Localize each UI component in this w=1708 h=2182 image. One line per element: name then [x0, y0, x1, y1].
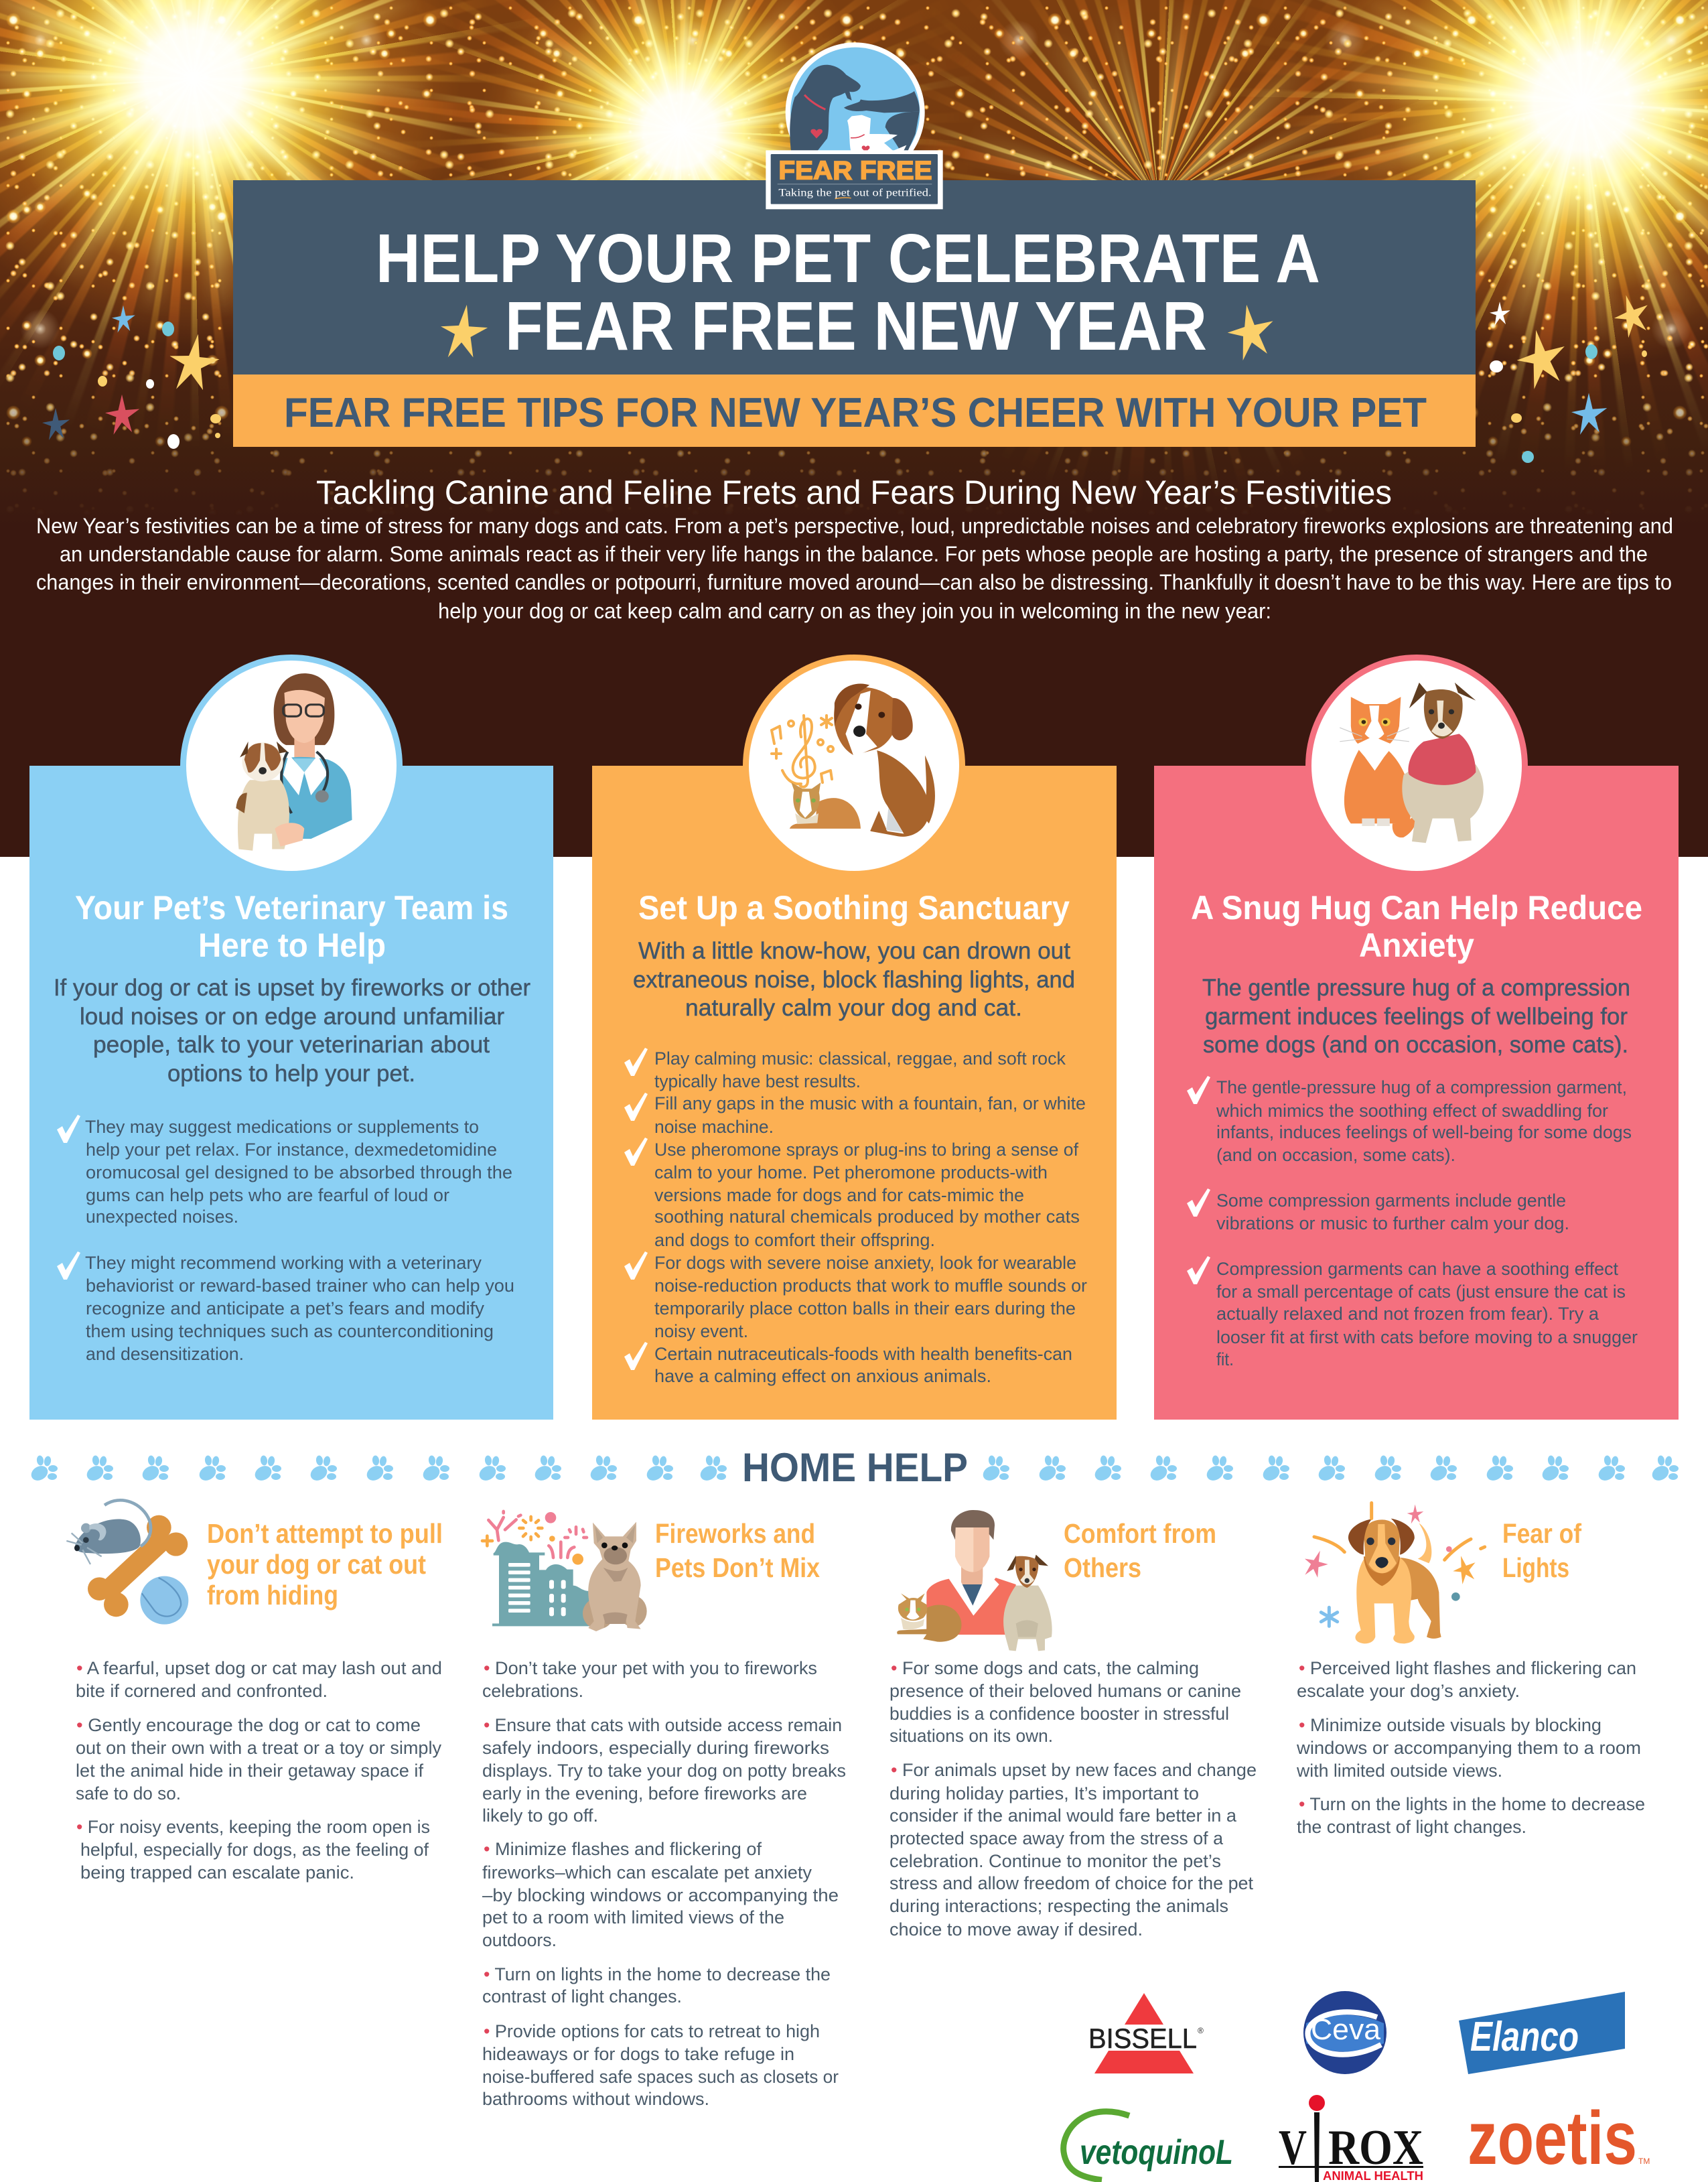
checklist: They may suggest medications or supplements to: [85, 1117, 479, 1137]
tips: protected space away from the stress of a: [889, 1828, 1224, 1848]
tips: situations on its own.: [889, 1726, 1053, 1746]
icon: city, fireworks and bulldog: [482, 1511, 647, 1631]
checklist: and dogs to comfort their offspring.: [654, 1230, 935, 1250]
logo: Vetoquinol: [1064, 2112, 1233, 2180]
panel: snug hug: [1154, 655, 1679, 1420]
tips: safe to do so.: [76, 1783, 181, 1803]
tips: • Perceived light flashes and flickering can: [1299, 1658, 1636, 1678]
checklist: which mimics the soothing effect of swaddling for: [1216, 1101, 1608, 1121]
tips: • Minimize outside visuals by blocking: [1299, 1715, 1602, 1735]
checklist: gums can help pets who are fearful of loud or: [86, 1185, 449, 1205]
checklist: The gentle-pressure hug of a compression garment,: [1216, 1077, 1627, 1097]
tips: the contrast of light changes.: [1297, 1817, 1526, 1837]
checklist: typically have best results.: [654, 1071, 861, 1091]
heading: [655, 1518, 820, 1583]
fireworks background: [0, 0, 1708, 857]
checklist: [1187, 1076, 1638, 1369]
intro text: loud noises or on edge around unfamiliar: [80, 1004, 504, 1030]
tips: stress and allow freedom of choice for the pet: [889, 1873, 1253, 1893]
tips: helpful, especially for dogs, as the feeling of: [80, 1840, 429, 1860]
tips: • Provide options for cats to retreat to high: [484, 2021, 820, 2041]
logo: Elanco: Elanco: [1470, 2014, 1579, 2060]
checklist: fit.: [1216, 1349, 1234, 1369]
logo: Bissell: ®: [1198, 2026, 1204, 2035]
heading: Anxiety: [1359, 927, 1474, 964]
tips: • A fearful, upset dog or cat may lash out and: [76, 1658, 442, 1678]
heading: Fear of: [1502, 1518, 1581, 1549]
checklist: Use pheromone sprays or plug-ins to bring a sense of: [654, 1140, 1078, 1160]
subtitle band: FEAR FREE TIPS FOR NEW YEAR’S CHEER WITH YOUR PET: [284, 390, 1427, 436]
tips: • For animals upset by new faces and change: [891, 1760, 1257, 1780]
checklist: recognize and anticipate a pet’s fears and modify: [86, 1298, 484, 1318]
checklist: versions made for dogs and for cats-mimic the: [654, 1185, 1024, 1205]
tips: • Gently encourage the dog or cat to come: [76, 1715, 421, 1735]
intro text: some dogs (and on occasion, some cats).: [1203, 1032, 1628, 1058]
title banner: HELP YOUR PET CELEBRATE A: [376, 220, 1320, 297]
checklist: behaviorist or reward-based trainer who can help you: [86, 1276, 514, 1296]
icon: vet with dog: [236, 673, 352, 851]
checklist: for a small percentage of cats (just ensure the cat is: [1216, 1282, 1626, 1302]
checklist: them using techniques such as counterconditioning: [86, 1321, 494, 1341]
heading: Here to Help: [198, 927, 386, 964]
heading: Comfort from: [1064, 1518, 1216, 1549]
checklist: noise-reduction products that work to muffle sounds or: [654, 1276, 1087, 1296]
section heading: home help with paw row: HOME HELP: [742, 1445, 968, 1490]
column: comfort: [889, 1510, 1257, 1939]
intro text: [1202, 975, 1630, 1058]
logo: Ceva: [1303, 1991, 1386, 2074]
tips: [889, 1658, 1257, 1939]
heading: Lights: [1502, 1552, 1569, 1583]
tips: • Minimize flashes and flickering of: [484, 1839, 762, 1859]
intro paragraph: [36, 514, 1673, 623]
tips: outdoors.: [482, 1930, 557, 1950]
column: fireworks: [482, 1511, 846, 2109]
checklist: Play calming music: classical, reggae, and soft rock: [654, 1048, 1066, 1069]
logo: Bissell: BISSELL: [1088, 2023, 1197, 2054]
checklist: and desensitization.: [86, 1344, 244, 1364]
icon: music notes: [772, 715, 833, 787]
icon: dog: [834, 684, 935, 837]
intro paragraph: changes in their environment—decorations, scented candles or potpourri, furniture moved around—can also be distressing. Thankfully it doesn’t have to be this way. Here are tips to: [36, 570, 1672, 594]
logo: Elanco: [1459, 1992, 1625, 2074]
checklist: (and on occasion, some cats).: [1216, 1145, 1455, 1165]
checklist: [57, 1115, 514, 1364]
panel: soothing sanctuary: [592, 655, 1117, 1420]
tips: presence of their beloved humans or canine: [889, 1681, 1241, 1701]
tips: choice to move away if desired.: [889, 1919, 1143, 1939]
icon: man with cat and dog: [897, 1510, 1052, 1651]
intro text: naturally calm your dog and cat.: [685, 995, 1022, 1021]
tips: celebrations.: [482, 1681, 583, 1701]
title banner: [233, 180, 1476, 374]
intro paragraph: an understandable cause for alarm. Some animals react as if their very life hangs in the balance. For pets whose people are hosting a party, the presence of strangers and the: [60, 542, 1648, 566]
intro heading: Tackling Canine and Feline Frets and Fears During New Year’s Festivities: [316, 474, 1392, 511]
icon: cat and dog in sweater: [1340, 683, 1484, 843]
logo: Virox: ROX: [1328, 2120, 1423, 2175]
tips: • For noisy events, keeping the room open is: [76, 1817, 430, 1837]
intro text: With a little know-how, you can drown out: [638, 938, 1070, 964]
tips: bathrooms without windows.: [482, 2089, 709, 2109]
checklist: help your pet relax. For instance, dexmedetomidine: [86, 1140, 497, 1160]
title banner: FEAR FREE NEW YEAR: [505, 287, 1207, 364]
logo: Fear Free: FEAR FREE: [778, 155, 932, 185]
logo: Ceva: Ceva: [1311, 2013, 1381, 2046]
intro paragraph: New Year’s festivities can be a time of stress for many dogs and cats. From a pet’s perspective, loud, unpredictable noises and celebratory fireworks explosions are threatening and: [36, 514, 1673, 538]
checklist: calm to your home. Pet pheromone products-with: [654, 1162, 1048, 1182]
decorative stars and dots: right: [1490, 291, 1654, 463]
heading: Set Up a Soothing Sanctuary: [638, 889, 1070, 927]
checklist: noise machine.: [654, 1117, 774, 1137]
firework rays: [0, 0, 1708, 476]
tips: • Don’t take your pet with you to fireworks: [484, 1658, 817, 1678]
logo: Fear Free: Taking the pet out of petrified.: [778, 188, 932, 199]
checklist: They might recommend working with a veterinary: [85, 1253, 482, 1273]
checklist: Fill any gaps in the music with a fountain, fan, or white: [654, 1093, 1086, 1113]
tips: displays. Try to take your dog on potty breaks: [482, 1761, 846, 1781]
logo: Bissell: [1088, 1993, 1204, 2073]
heading: [207, 1518, 443, 1611]
checklist: [624, 1048, 1087, 1386]
tips: buddies is a confidence booster in stressful: [889, 1704, 1229, 1724]
tips: bite if cornered and confronted.: [76, 1681, 328, 1701]
column: lights: [1296, 1503, 1645, 1837]
heading: Your Pet’s Veterinary Team is: [75, 889, 508, 927]
checklist: have a calming effect on anxious animals.: [654, 1366, 991, 1386]
intro text: [54, 975, 530, 1087]
tips: • Turn on lights in the home to decrease the: [484, 1964, 831, 1984]
sponsor logos: [1064, 1991, 1650, 2182]
logo: Zoetis: zoetis: [1468, 2096, 1637, 2180]
decorative stars and dots: left: [42, 305, 223, 449]
tips: let the animal hide in their getaway space if: [76, 1761, 424, 1781]
tips: escalate your dog’s anxiety.: [1297, 1681, 1520, 1701]
intro paragraph: help your dog or cat keep calm and carry on as they join you in welcoming in the new year:: [438, 599, 1271, 623]
intro text: The gentle pressure hug of a compression: [1202, 975, 1630, 1001]
checklist: actually relaxed and not frozen from fear). Try a: [1216, 1304, 1599, 1324]
burst glows: [0, 0, 1708, 355]
tips: • For some dogs and cats, the calming: [891, 1658, 1199, 1678]
checklist: Compression garments can have a soothing effect: [1216, 1259, 1618, 1279]
icon: cat: [790, 782, 861, 829]
intro text: extraneous noise, block flashing lights, and: [633, 967, 1075, 993]
checklist: Certain nutraceuticals-foods with health benefits-can: [654, 1344, 1072, 1364]
checklist: For dogs with severe noise anxiety, look for wearable: [654, 1253, 1076, 1273]
intro text: people, talk to your veterinarian about: [93, 1032, 490, 1058]
heading: [1502, 1518, 1581, 1583]
heading: A Snug Hug Can Help Reduce: [1191, 889, 1642, 927]
logo: Virox: V: [1279, 2120, 1307, 2175]
panel: veterinary team: [29, 655, 553, 1420]
tips: likely to go off.: [482, 1805, 598, 1826]
intro text: [633, 938, 1075, 1021]
tips: contrast of light changes.: [482, 1986, 682, 2006]
heading: your dog or cat out: [207, 1549, 426, 1580]
tips: during holiday parties, It’s important to: [889, 1783, 1199, 1803]
subtitle band: [233, 374, 1476, 447]
icon: startled dog with sparks: [1299, 1503, 1485, 1643]
tips: • Ensure that cats with outside access remain: [484, 1715, 842, 1735]
tips: [1296, 1658, 1645, 1837]
tips: consider if the animal would fare better in a: [889, 1805, 1237, 1826]
tips: –by blocking windows or accompanying the: [482, 1885, 839, 1905]
logo: Zoetis: TM: [1638, 2157, 1650, 2166]
tips: early in the evening, before fireworks are: [482, 1783, 807, 1803]
checklist: oromucosal gel designed to be absorbed through the: [86, 1162, 512, 1182]
heading: from hiding: [207, 1580, 338, 1611]
heading: Fireworks and: [655, 1518, 815, 1549]
tips: safely indoors, especially during fireworks: [482, 1738, 829, 1758]
checklist: Some compression garments include gentle: [1216, 1190, 1566, 1211]
column: hiding: [66, 1500, 443, 1883]
logo: Vetoquinol: vetoquinoL: [1080, 2133, 1233, 2172]
intro text: garment induces feelings of wellbeing for: [1205, 1004, 1628, 1030]
section heading: home help with paw row: [29, 1445, 1679, 1490]
checklist: vibrations or music to further calm your dog.: [1216, 1213, 1569, 1233]
tips: being trapped can escalate panic.: [80, 1862, 354, 1883]
tips: fireworks–which can escalate pet anxiety: [482, 1862, 812, 1883]
heading: Pets Don’t Mix: [655, 1552, 820, 1583]
tips: pet to a room with limited views of the: [482, 1907, 784, 1927]
sparkles: [0, 0, 1708, 516]
tips: [76, 1658, 442, 1883]
tips: noise-buffered safe spaces such as closets or: [482, 2067, 839, 2087]
heading: [1191, 889, 1642, 964]
icon: mouse, bone and ball: [66, 1500, 188, 1625]
checklist: infants, induces feelings of well-being for some dogs: [1216, 1122, 1632, 1142]
intro text: If your dog or cat is upset by fireworks or other: [54, 975, 530, 1001]
tips: out on their own with a treat or a toy or simply: [76, 1738, 441, 1758]
heading: [75, 889, 508, 964]
checklist: soothing natural chemicals produced by mother cats: [654, 1207, 1080, 1227]
tips: hideaways or for dogs to take refuge in: [482, 2044, 794, 2064]
checklist: unexpected noises.: [86, 1207, 238, 1227]
tips: [482, 1658, 846, 2109]
logo: Fear Free: [766, 42, 943, 209]
tips: during interactions; respecting the animals: [889, 1896, 1228, 1916]
tips: with limited outside views.: [1296, 1761, 1502, 1781]
tips: windows or accompanying them to a room: [1296, 1738, 1641, 1758]
checklist: looser fit at first with cats before moving to a snugger: [1216, 1327, 1638, 1347]
tips: • Turn on the lights in the home to decrease: [1299, 1794, 1645, 1814]
heading: [1064, 1518, 1216, 1583]
intro text: options to help your pet.: [167, 1061, 415, 1087]
heading: Don’t attempt to pull: [207, 1518, 443, 1549]
heading: Others: [1064, 1552, 1141, 1583]
logo: Virox: [1279, 2095, 1423, 2182]
tips: celebration. Continue to monitor the pet’s: [889, 1851, 1221, 1871]
checklist: temporarily place cotton balls in their ears during the: [654, 1298, 1076, 1318]
checklist: noisy event.: [654, 1321, 748, 1341]
